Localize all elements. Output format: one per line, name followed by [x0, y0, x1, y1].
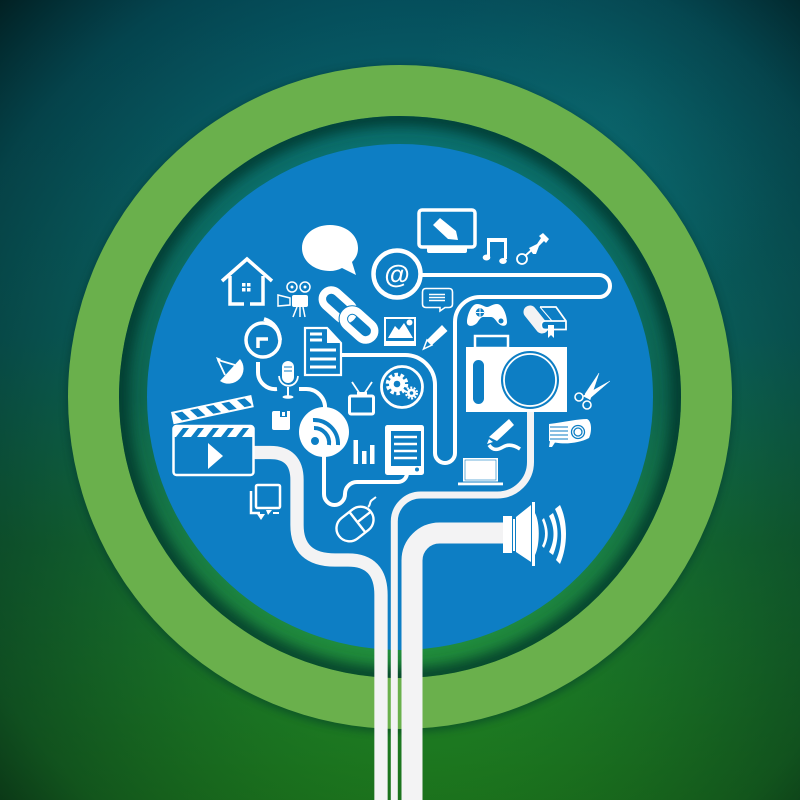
icon: television: [350, 382, 374, 414]
tube: camera to trunk: [394, 410, 530, 800]
icon: push pin: [517, 233, 549, 264]
tube: speaker to trunk: [412, 533, 506, 800]
icon: scissors: [575, 373, 610, 409]
icon: document: [305, 328, 341, 375]
inner dark ring: [119, 116, 681, 678]
icon: satellite dish: [216, 357, 244, 384]
icon: clapperboard: [171, 395, 254, 475]
icon: pencil: [424, 325, 448, 349]
icon: clock: [246, 319, 280, 357]
icon: house: [222, 259, 272, 304]
icon: game controller: [467, 304, 507, 326]
icon: bar chart: [354, 440, 374, 464]
icon: music note: [483, 238, 507, 264]
icon: book: [530, 307, 566, 338]
connector lines: [258, 275, 610, 505]
tube: clapper to trunk: [252, 452, 381, 800]
icon: film camera: [278, 282, 310, 317]
icon: message box: [422, 288, 452, 311]
icon: at sign: @: [384, 259, 410, 289]
icon: speech bubble: [302, 225, 358, 275]
icon: photo camera: [466, 336, 567, 412]
icon: floppy disk: [272, 411, 290, 430]
icon: projector: [549, 419, 591, 447]
blue circle: [147, 144, 653, 650]
icon: marker: [487, 419, 520, 449]
icon: at sign: [374, 250, 420, 298]
icon: computer mouse: [331, 497, 379, 547]
icon: RSS: [299, 407, 349, 457]
icon: gears: [382, 366, 422, 408]
icon: tablet: [385, 425, 424, 475]
icon: microphone: [279, 361, 298, 399]
icon: loudspeaker: [503, 502, 566, 566]
icon: double chat bubbles: [251, 485, 280, 520]
icon: laptop: [458, 458, 503, 485]
icon: picture: [384, 317, 416, 346]
icon: chain link: [319, 286, 378, 344]
icon: monitor: [419, 210, 475, 253]
green outer ring: [66, 65, 734, 733]
